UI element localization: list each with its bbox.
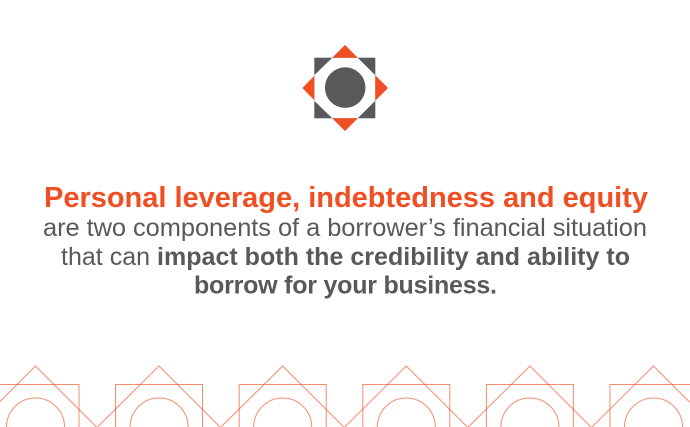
text block: main statement bbox=[43, 182, 648, 300]
icon: logo, circle in square and diamond bbox=[302, 45, 388, 131]
decorative pattern: outlined squares, diamonds and circles along the bottom bbox=[0, 366, 690, 427]
body line 2: that can impact both the credibility and ability to bbox=[61, 243, 630, 271]
heading: Personal leverage, indebtedness and equity bbox=[44, 182, 648, 214]
body line 3: borrow for your business. bbox=[194, 272, 497, 300]
body line 1: are two components of a borrower’s financial situation bbox=[43, 214, 647, 242]
